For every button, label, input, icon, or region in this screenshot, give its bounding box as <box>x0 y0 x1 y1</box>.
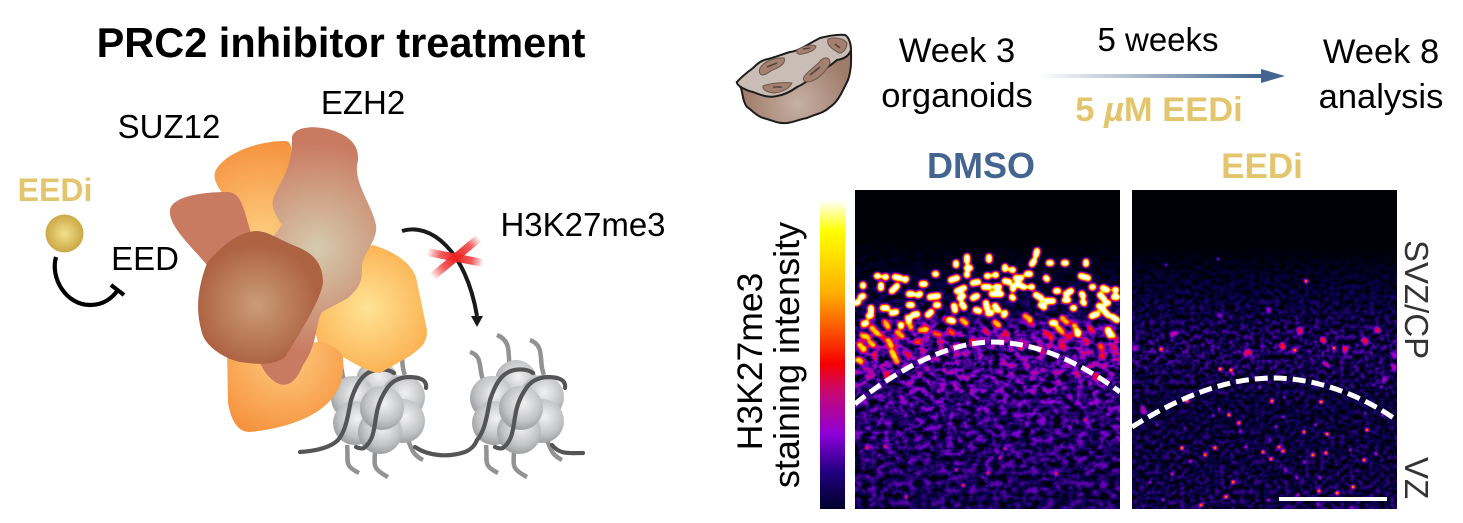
label: Week 8 analysis: Week 8 <box>1323 33 1439 71</box>
icon: EEDi ball <box>46 214 84 252</box>
red cross <box>427 238 483 277</box>
SUZ12 right lobe <box>310 245 427 373</box>
EZH2 <box>255 127 376 385</box>
label: Week 8 analysis: analysis <box>1319 78 1443 116</box>
label: 5 uM EEDi: 5 µM EEDi <box>1075 91 1243 129</box>
label: Week 3 organoids: organoids <box>881 77 1033 115</box>
heading: DMSO: DMSO <box>927 145 1035 186</box>
PRC2 complex <box>170 127 427 432</box>
SUZ12 lower lobe <box>227 342 343 432</box>
inhibition arrow <box>55 257 124 305</box>
label: EED: EED <box>111 240 179 277</box>
label: EEDi inhibitor: EEDi <box>18 172 92 208</box>
colour bar <box>820 200 845 509</box>
label: 5 weeks: 5 weeks <box>1097 21 1219 58</box>
label: Week 3 organoids: Week 3 <box>899 32 1015 70</box>
heading: EEDi: EEDi <box>1221 147 1303 186</box>
label: H3K27me3: H3K27me3 <box>500 206 666 243</box>
region label: VZ: VZ <box>1398 457 1435 499</box>
boundary dashed line <box>1132 378 1395 427</box>
EED core <box>198 231 323 364</box>
methylation arrow <box>402 229 483 327</box>
DNA linker <box>415 440 583 455</box>
label: SUZ12: SUZ12 <box>118 108 220 145</box>
nucleosome right <box>470 335 565 477</box>
axis label: staining intensity: H3K27me3 <box>730 273 770 450</box>
panel: DMSO micrograph <box>855 190 1120 509</box>
region label: SVZ/CP: SVZ/CP <box>1398 240 1435 359</box>
title: PRC2 inhibitor treatment <box>97 19 586 66</box>
panel: EEDi micrograph <box>1132 190 1397 509</box>
nucleosome left <box>331 335 426 477</box>
axis label: staining intensity: staining intensity <box>766 222 807 488</box>
SUZ12 upper lobe <box>215 141 291 250</box>
DNA linker left <box>300 440 338 452</box>
label: EZH2: EZH2 <box>321 84 405 121</box>
timeline arrow <box>1038 69 1285 83</box>
EED left lobe <box>170 192 252 265</box>
icon: organoid <box>737 35 851 123</box>
scale bar <box>1279 497 1387 501</box>
boundary dashed line <box>855 342 1120 404</box>
